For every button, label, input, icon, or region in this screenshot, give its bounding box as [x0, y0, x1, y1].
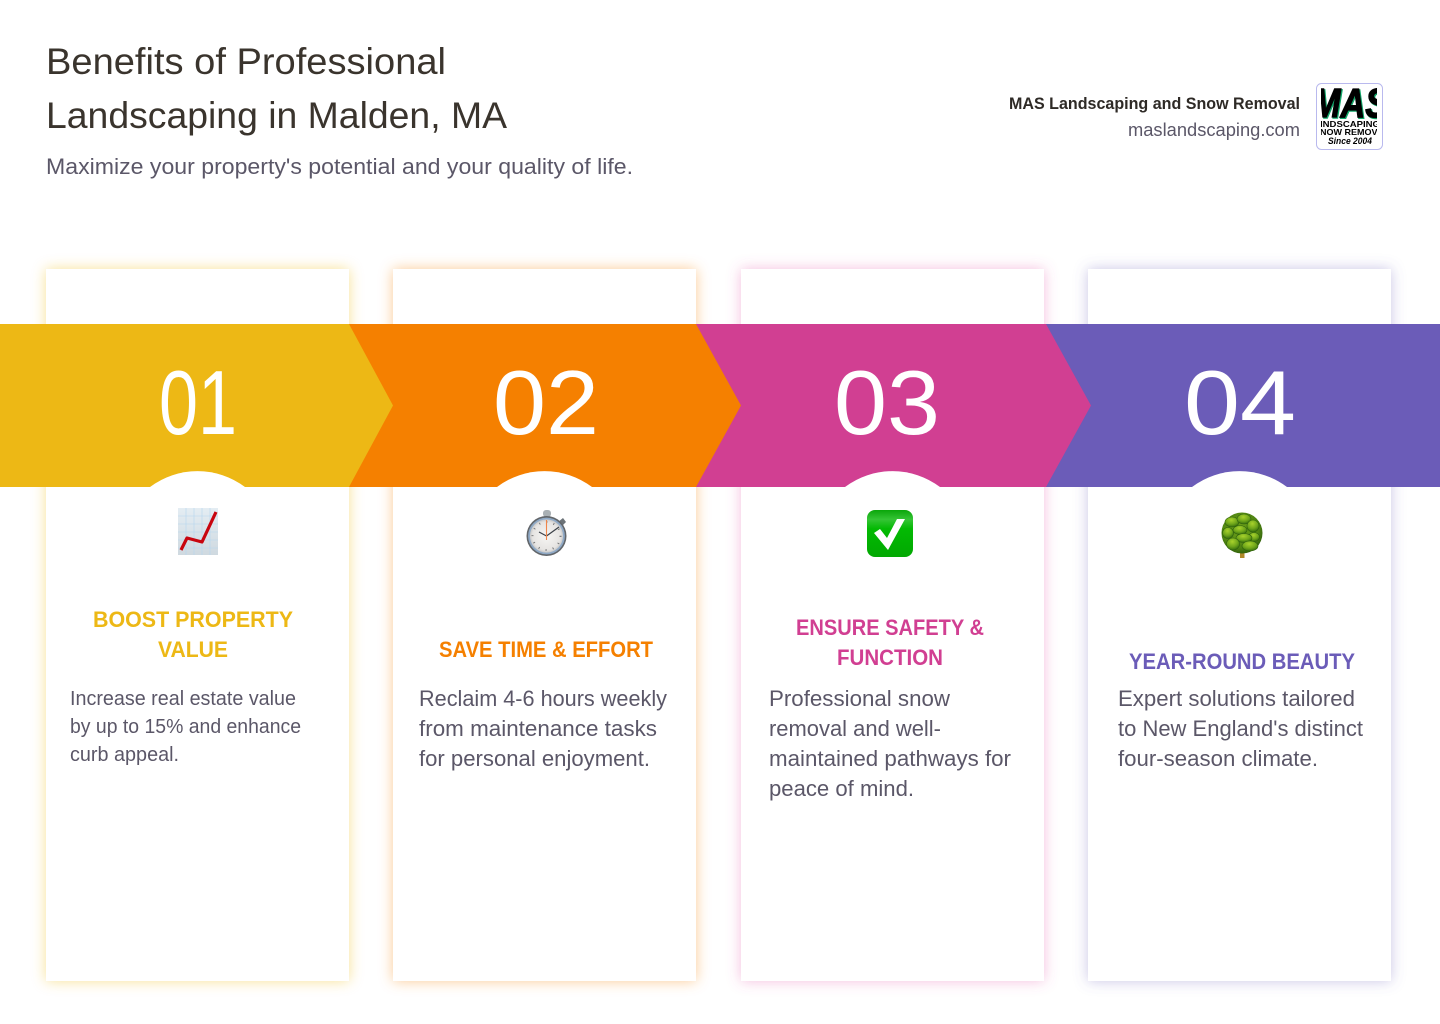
number 01: 01	[159, 353, 237, 454]
heading: ensure safety and function: ENSURE SAFETY &	[796, 615, 984, 640]
text: card 2 body: from maintenance tasks	[419, 716, 657, 741]
number 02: 02	[493, 353, 599, 454]
heading: boost property value: VALUE	[158, 637, 228, 662]
icon mount 3	[845, 471, 940, 487]
panel: card 3 background	[741, 269, 1044, 981]
logo: MAS	[1313, 81, 1389, 127]
arrow band 3	[696, 324, 1091, 487]
panel: card 2 background	[393, 269, 696, 981]
arrow band 1	[0, 324, 393, 487]
heading: year-round beauty: YEAR-ROUND BEAUTY	[1129, 649, 1355, 674]
title: Benefits of Professional	[46, 41, 446, 82]
heading: save time and effort: SAVE TIME & EFFORT	[439, 637, 654, 662]
brand name and website	[1009, 94, 1300, 140]
logo: MAS	[1312, 80, 1388, 126]
logo	[1316, 83, 1383, 150]
text: card 2 body: for personal enjoyment.	[419, 746, 650, 771]
text: card 4 body: to New England's distinct	[1118, 716, 1363, 741]
icon mount 1	[150, 471, 245, 487]
title: Landscaping in Malden, MA	[46, 95, 507, 136]
text: card 4 body	[1118, 686, 1363, 771]
logo: INDSCAPING	[1320, 119, 1380, 129]
icon: tree	[1222, 512, 1262, 558]
text: card 3 body: removal and well-	[769, 716, 941, 741]
brand name and website: MAS Landscaping and Snow Removal	[1009, 94, 1300, 113]
logo: Since 2004	[1328, 136, 1372, 146]
heading: boost property value	[93, 607, 293, 662]
text: card 3 body: maintained pathways for	[769, 746, 1011, 771]
heading: boost property value: BOOST PROPERTY	[93, 607, 293, 632]
icon: rising chart	[178, 508, 218, 555]
number 03: 03	[834, 353, 940, 454]
text: card 4 body: Expert solutions tailored	[1118, 686, 1355, 711]
subtitle: Maximize your property's potential and your quality of life.	[46, 154, 633, 179]
panel: card 1 background	[46, 269, 349, 981]
icon mount 2	[497, 471, 592, 487]
icon mount 4	[1192, 471, 1287, 487]
text: card 1 body: by up to 15% and enhance	[70, 716, 301, 738]
heading: ensure safety and function	[796, 615, 984, 670]
number 04: 04	[1184, 353, 1296, 454]
text: card 3 body: peace of mind.	[769, 776, 914, 801]
title	[46, 41, 507, 136]
arrow band 2	[349, 324, 741, 487]
text: card 4 body: four-season climate.	[1118, 746, 1318, 771]
text: card 2 body	[419, 686, 667, 771]
text: card 1 body: curb appeal.	[70, 744, 179, 766]
heading: ensure safety and function: FUNCTION	[837, 645, 943, 670]
text: card 1 body: Increase real estate value	[70, 688, 296, 710]
logo: NOW REMOVI	[1320, 127, 1380, 137]
brand name and website: maslandscaping.com	[1128, 120, 1300, 140]
panel: card 4 background	[1088, 269, 1391, 981]
arrow band 4	[1046, 324, 1440, 487]
text: card 2 body: Reclaim 4-6 hours weekly	[419, 686, 667, 711]
icon: check mark	[867, 510, 913, 557]
text: card 3 body	[769, 686, 1011, 801]
text: card 1 body	[70, 688, 301, 766]
text: card 3 body: Professional snow	[769, 686, 950, 711]
icon: stopwatch	[526, 510, 566, 556]
